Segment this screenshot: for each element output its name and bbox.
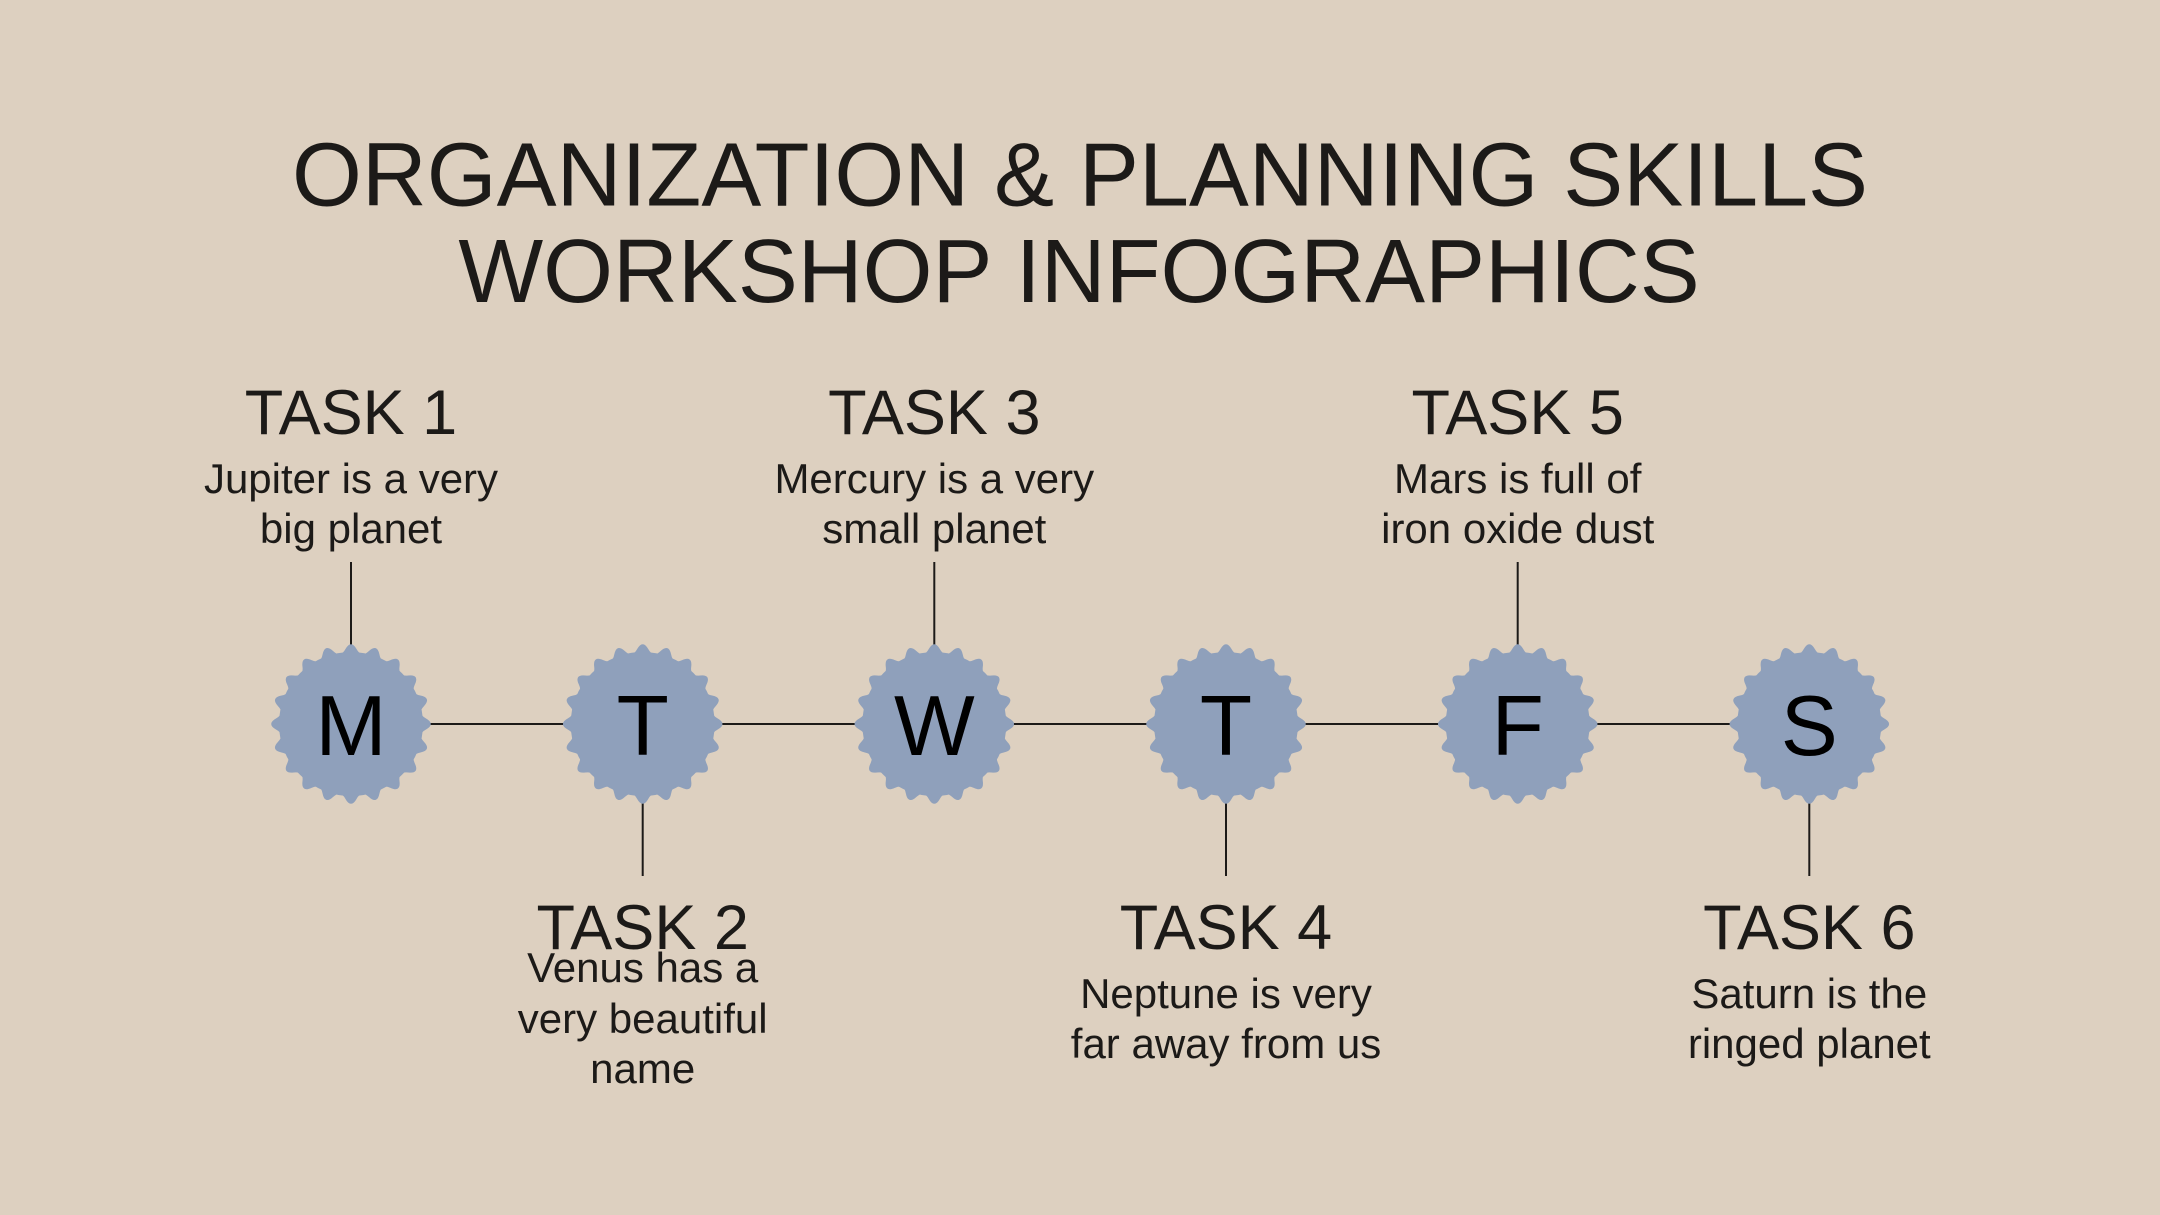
task 6 description: ringed planet: [1688, 1020, 1931, 1067]
step: Thursday, task 4: [1071, 645, 1381, 1067]
step: Friday, task 5: [1381, 378, 1655, 803]
task 1 heading: TASK 1: [245, 378, 457, 448]
badge M: M: [315, 679, 387, 774]
task 4 heading: TASK 4: [1120, 893, 1332, 963]
badge W: [855, 645, 1014, 803]
task 2 heading: TASK 2: [536, 893, 749, 963]
task 1 description: [204, 455, 498, 552]
step: Saturday, task 6: [1688, 645, 1931, 1067]
task 4 description: [1071, 970, 1381, 1067]
task 1 description: big planet: [260, 505, 442, 552]
task 4 description: far away from us: [1071, 1020, 1381, 1067]
badge T: T: [617, 679, 669, 774]
task 2 description: Venus has a: [527, 944, 759, 991]
task 1 connector: [350, 562, 352, 650]
task 4 connector: [1225, 798, 1227, 876]
step: Tuesday, task 2: [518, 645, 768, 1092]
badge T: [1147, 645, 1305, 803]
task 3 description: Mercury is a very: [774, 455, 1094, 502]
task 3 description: [774, 455, 1094, 552]
task 4 description: Neptune is very: [1080, 970, 1372, 1017]
task 2 description: very beautiful: [518, 995, 768, 1042]
title: ORGANIZATION & PLANNING SKILLS: [292, 126, 1868, 226]
title: [292, 126, 1868, 322]
step: Wednesday, task 3: [774, 378, 1094, 803]
task 6 description: [1688, 970, 1931, 1067]
badge F: [1438, 645, 1597, 803]
task 1 description: Jupiter is a very: [204, 455, 498, 502]
task 5 description: Mars is full of: [1394, 455, 1642, 502]
task 5 connector: [1517, 562, 1519, 650]
task 6 heading: TASK 6: [1703, 893, 1916, 963]
title: WORKSHOP INFOGRAPHICS: [458, 222, 1700, 322]
badge F: F: [1492, 679, 1544, 774]
badge T: T: [1200, 679, 1252, 774]
badge M: [272, 645, 430, 803]
task 2 description: [518, 944, 768, 1092]
task 3 heading: TASK 3: [828, 378, 1041, 448]
task 6 connector: [1808, 798, 1810, 876]
task 5 description: [1381, 455, 1655, 552]
task 5 description: iron oxide dust: [1381, 505, 1655, 552]
task 2 description: name: [590, 1045, 695, 1092]
badge S: [1730, 645, 1889, 803]
badge W: W: [894, 679, 975, 774]
badge T: [563, 645, 722, 803]
badge S: S: [1781, 679, 1838, 774]
task 2 connector: [642, 798, 644, 876]
step: Monday, task 1: [204, 378, 498, 803]
timeline connector: [351, 723, 1809, 725]
task 3 connector: [933, 562, 935, 650]
task 5 heading: TASK 5: [1411, 378, 1624, 448]
task 3 description: small planet: [822, 505, 1047, 552]
task 6 description: Saturn is the: [1691, 970, 1927, 1017]
